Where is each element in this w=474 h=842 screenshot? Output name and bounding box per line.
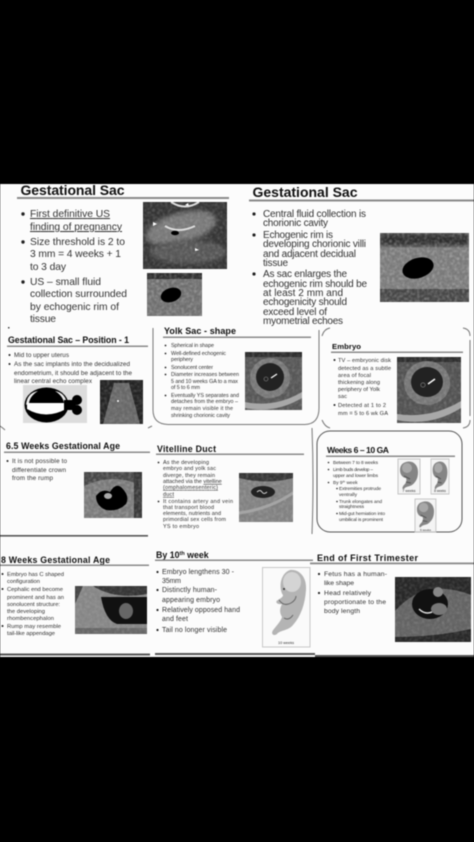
illustration: embryo 7 weeks: 7 weeks [402, 489, 416, 493]
bullet list: vitelline duct [158, 460, 233, 530]
bullet list: vitelline duct: duct [163, 492, 174, 498]
bullet list: development: umbilical is prominent [339, 517, 384, 523]
bullet list: embryo: mm = 5 to 6 wk GA [338, 411, 388, 417]
bullet list: embryo: sac [338, 394, 347, 400]
heading: Yolk Sac: Yolk Sac - shape [164, 326, 236, 336]
bullet list: definition [21, 209, 127, 325]
bullet list: position: As the sac implants into the decidualized [14, 361, 130, 368]
bullet list: 10th week: Embryo lengthens 30 - [162, 569, 235, 576]
bullet list: position [8, 352, 132, 385]
bullet list: definition: by echogenic rim of [30, 302, 119, 313]
bullet list: development: th [343, 480, 345, 484]
panel: gestational sac features [249, 184, 474, 327]
bullet list: 10th week: appearing embryo [162, 597, 220, 604]
bullet list: development: By 9 [333, 481, 343, 486]
bullet list: yolk sac: Spherical in shape [171, 343, 214, 349]
bullet list: sac features: myometrial echoes [263, 316, 343, 327]
bullet list: development: Limb buds develop – [333, 467, 373, 473]
panel: gestational sac definition [17, 182, 229, 325]
ultrasound: end of first trimester [394, 576, 472, 643]
bullet list: yolk sac: 5 and 10 weeks GA to a max [171, 379, 238, 385]
ultrasound: sac small [146, 272, 203, 317]
illustration: embryo 8 weeks [431, 459, 449, 494]
bullet list: 10th week [156, 569, 240, 634]
diagram: uterus cross-section [22, 384, 88, 424]
bullet list: development [328, 460, 385, 523]
bullet list: development: ventrally [339, 492, 358, 498]
bullet list: position: endometrium, it should be adjacent to the [14, 370, 132, 377]
bullet list: vitelline duct: (omphalomesenteric) [163, 485, 218, 491]
bullet list: 10th week: Tail no longer visible [162, 627, 227, 634]
bullet list: yolk sac: detaches from the embryo – [171, 399, 238, 405]
bullet list: vitelline duct: embryo and yolk sac [163, 466, 216, 472]
bullet list: vitelline duct: elements, nutrients and [163, 511, 221, 517]
bullet list: definition: Size threshold is 2 to [30, 237, 125, 248]
panel: end of first trimester [310, 553, 474, 657]
bullet list: development: Mid-gut herniation into [339, 511, 385, 517]
bullet list: embryo: periphery of Yolk [338, 387, 380, 393]
bullet list: vitelline duct: diverge, they remain [163, 473, 215, 479]
ultrasound: early sac with arrows [142, 201, 228, 270]
ultrasound: 6.5 weeks [83, 471, 143, 519]
illustration: embryo 7 weeks [398, 459, 420, 494]
bullet list: development: week [345, 480, 358, 486]
bullet list: 8 weeks: the developing [7, 609, 45, 615]
bullet list: embryo [334, 358, 391, 417]
bullet list: vitelline duct: that transport blood [163, 505, 214, 511]
bullet list: sac features: tissue [263, 258, 288, 269]
bullet list: vitelline duct: primordial sex cells from [163, 517, 226, 523]
bullet list: development: Trunk elongates and [339, 499, 382, 505]
illustration: embryo 8 weeks: 8 weeks [434, 489, 446, 493]
bullet list: embryo: TV – embryonic disk [338, 358, 391, 364]
panel: 6.5 weeks [0, 426, 152, 537]
bullet list: definition: collection surrounded [30, 289, 127, 300]
bullet list: 10th week: Distinctly human- [162, 587, 218, 594]
bullet list: embryo: thickening along [338, 380, 380, 386]
bullet list: embryo: Detected at 1 to 2 [338, 403, 386, 409]
bullet list: yolk sac: periphery [171, 357, 193, 363]
bullet list: first trimester: body length [324, 608, 360, 615]
heading: End of First Trimester: End of First Trimester [317, 553, 418, 563]
bullet list: 10th week: and feet [162, 616, 188, 623]
bullet list: definition: US – small fluid [30, 277, 101, 288]
bullet list: 8 weeks: Rump may resemble [7, 624, 61, 630]
heading: By 10th week: week [185, 550, 209, 560]
ultrasound: sac with echogenic rim [379, 232, 470, 303]
bullet list: 6.5 weeks: differentiate crown [12, 467, 66, 474]
heading: By 10th week: th [179, 551, 185, 557]
heading: 6.5 Weeks: 6.5 Weeks Gestational Age [6, 441, 120, 451]
illustration: 10 week embryo: 10 weeks [278, 641, 294, 645]
bullet list: definition: tissue [30, 314, 56, 325]
bullet list: yolk sac: Sonolucent center [171, 365, 213, 371]
bullet list: yolk sac [165, 343, 239, 419]
panel: weeks 6-10 GA [317, 431, 462, 532]
bullet list: sac features: As sac enlarges the [263, 269, 347, 280]
bullet list: 10th week: Relatively opposed hand [162, 607, 240, 614]
panel: yolk sac shape [153, 326, 319, 424]
illustration: embryo 9 weeks [415, 499, 436, 532]
bullet list: yolk sac: Well-defined echogenic [171, 351, 226, 357]
bullet list: yolk sac: Eventually YS separates and [171, 393, 239, 399]
bullet list: vitelline duct: attached via the vitelline [163, 479, 222, 485]
bullet list: 10th week: 35mm [162, 578, 181, 585]
bullet list: 6.5 weeks: It is not possible to [12, 458, 67, 465]
panel: 8 weeks [0, 555, 150, 656]
bullet list: first trimester [318, 571, 387, 615]
bullet list: position: Mid to upper uterus [14, 352, 69, 359]
bullet list: 8 weeks: sonolucent structure: [7, 602, 60, 608]
ultrasound: vitelline duct [238, 472, 294, 523]
bullet list: sac features: developing chorionic villi [263, 239, 366, 250]
bullet list: development: upper and lower limbs [333, 473, 379, 479]
bullet list: first trimester: proportionate to the [324, 599, 386, 606]
bullet list: 8 weeks: tail-like appendage [7, 631, 55, 637]
stray mark [8, 327, 10, 328]
bullet list: 8 weeks: Cephalic end become [7, 587, 63, 593]
bullet list: definition: finding of pregnancy [30, 222, 123, 233]
bullet list: definition: to 3 day [30, 262, 67, 273]
panel: vitelline duct [156, 428, 313, 534]
heading: Gestational Sac: Gestational Sac [20, 182, 125, 198]
heading: Vitelline Duct: Vitelline Duct [157, 444, 216, 454]
heading: 8 Weeks: 8 Weeks Gestational Age [1, 555, 110, 565]
bullet list: first trimester: Head relatively [324, 590, 372, 597]
heading: Weeks 6-10 GA: Weeks 6 – 10 GA [327, 445, 389, 455]
bullet list: sac features: Central fluid collection is [263, 209, 366, 220]
bullet list: 8 weeks [2, 572, 64, 637]
page background [0, 184, 474, 657]
bullet list: 8 weeks: rhombencephalon [7, 616, 54, 622]
heading: Embryo: Embryo [332, 342, 361, 351]
bullet list: sac features: echogenicity should [263, 297, 347, 308]
illustration: embryo 9 weeks: 9 weeks [420, 528, 431, 532]
heading: Position: Gestational Sac – Position - 1 [8, 335, 129, 345]
heading: By 10th week: By 10 [156, 550, 179, 560]
heading: Gestational Sac right: Gestational Sac [252, 184, 358, 200]
bullet list: yolk sac: of 5 to 6 mm [171, 385, 200, 391]
bullet list: definition: 3 mm = 4 weeks + 1 [30, 249, 121, 260]
bullet list: yolk sac: may remain visible it the [171, 406, 233, 412]
panel: gestational sac position [7, 335, 148, 424]
bullet list: sac features: Echogenic rim is [263, 230, 333, 241]
bullet list: yolk sac: Diameter increases between [171, 372, 239, 378]
bullet list: sac features: exceed level of [263, 307, 327, 318]
bullet list: embryo: area of focal [338, 373, 371, 379]
bullet list: vitelline duct: YS to embryo [163, 524, 199, 530]
ultrasound: 8 weeks [74, 585, 148, 635]
panel: embryo [322, 328, 470, 428]
bullet list: 8 weeks: Embryo has C shaped [7, 572, 64, 578]
illustration: 10 week embryo [262, 568, 310, 647]
ultrasound: embryo [396, 356, 462, 424]
bullet list: sac features [252, 209, 367, 327]
bullet list: sac features: and adjacent decidual [263, 249, 356, 260]
bullet list: definition: First definitive US [30, 209, 110, 220]
bullet list: sac features: chorionic cavity [263, 218, 328, 229]
top black band [0, 0, 474, 184]
bullet list: development: Extremities protrude [339, 486, 381, 492]
bullet list: position: linear central echo complex [14, 378, 93, 385]
bullet list: sac features: echogenic rim should be [263, 279, 367, 290]
bottom black band [0, 657, 474, 842]
panel: by 10th week [155, 550, 315, 655]
bullet list: development: straightness [339, 504, 365, 510]
bullet list: 6.5 weeks [6, 458, 67, 482]
bullet list: vitelline duct: As the developing [163, 460, 209, 466]
bullet list: 8 weeks: prominent and has an [7, 595, 64, 601]
bullet list: 8 weeks: configuration [7, 579, 40, 585]
bullet list: first trimester: Fetus has a human- [324, 571, 387, 578]
bullet list: yolk sac: shrinking chorionic cavity [171, 413, 230, 419]
bullet list: development: Between 7 to 8 weeks [333, 460, 379, 466]
ultrasound: yolk sac [244, 351, 303, 411]
bullet list: embryo: detected as a subtle [338, 366, 391, 372]
bullet list: vitelline duct: It contains artery and vein [163, 499, 233, 505]
bullet list: sac features: at least 2 mm and [263, 288, 343, 299]
ultrasound: uterus transverse [99, 379, 144, 425]
bullet list: first trimester: like shape [324, 580, 354, 587]
bullet list: 6.5 weeks: from the rump [12, 475, 53, 482]
